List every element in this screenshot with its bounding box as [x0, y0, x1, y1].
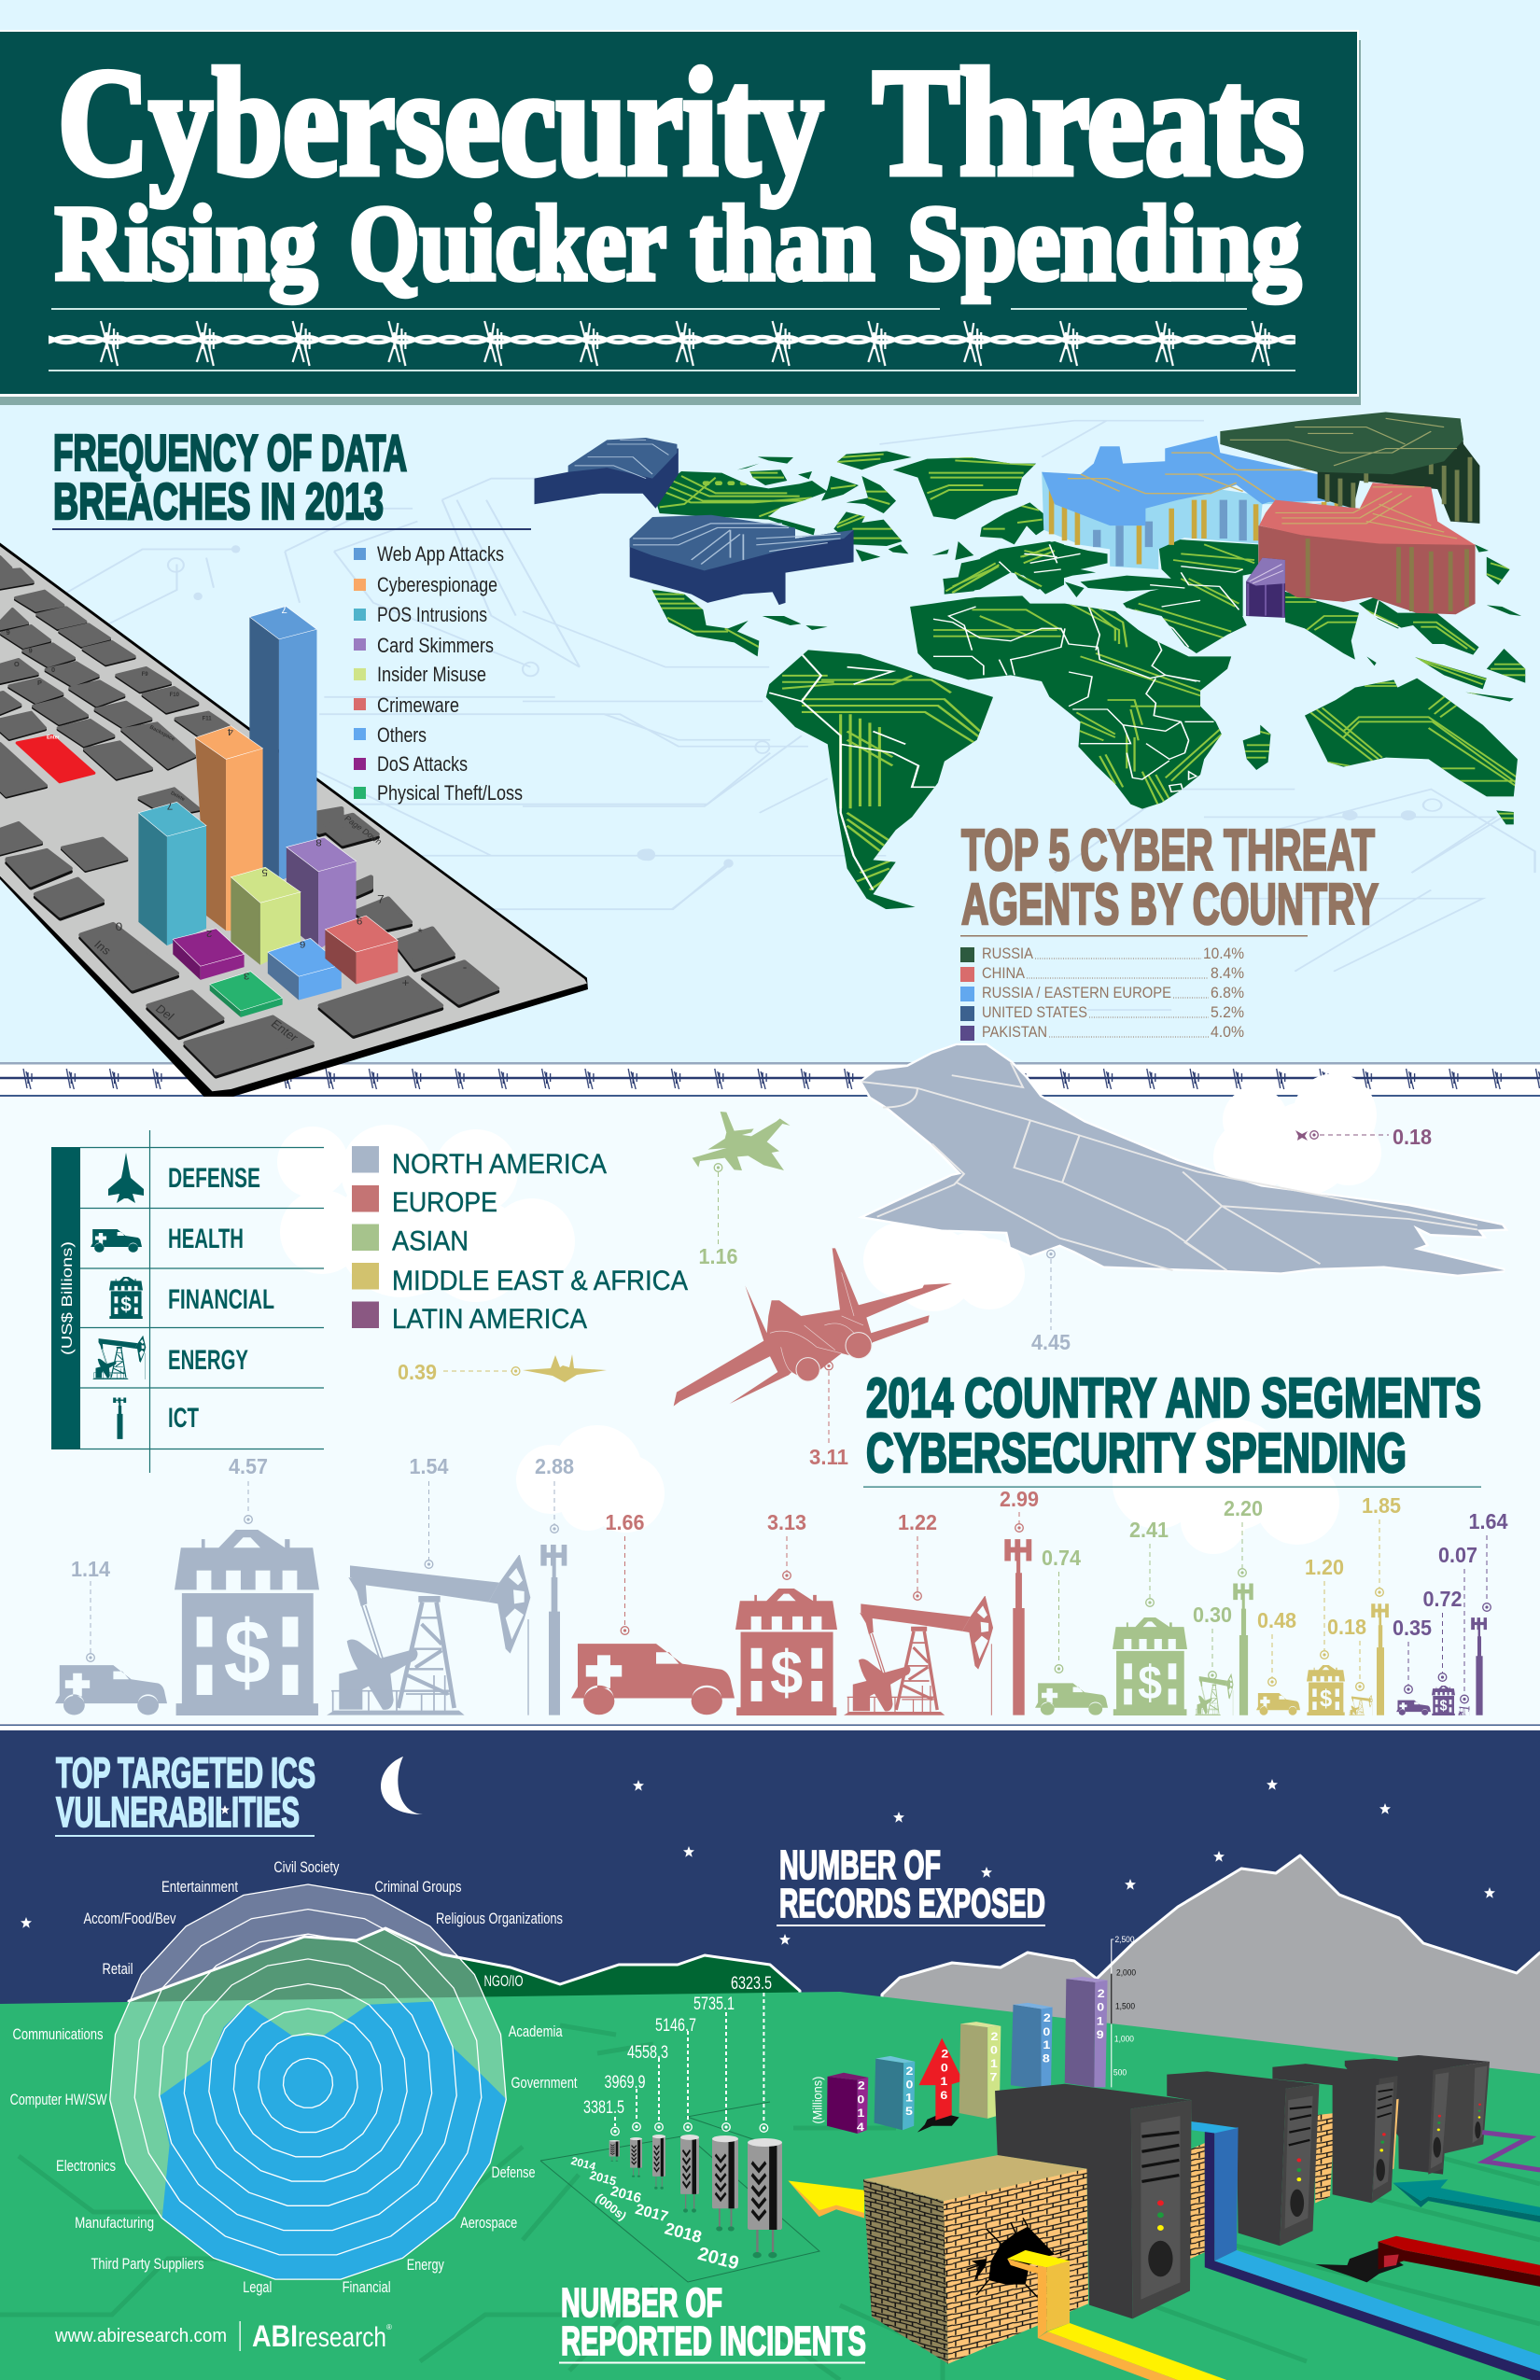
defense value callouts: 1.16: [698, 1244, 737, 1268]
North America spending icons: 1.14: [71, 1557, 110, 1581]
row: energy: [92, 1336, 248, 1379]
bar 2015: 0: [906, 2078, 913, 2091]
circuit background lines: [49, 479, 770, 909]
bar: web app attacks: 7: [281, 604, 287, 614]
jet: Latin America defense: [1295, 1130, 1308, 1141]
hole in wall: [967, 2218, 1070, 2297]
data breach legend: [354, 542, 523, 805]
capacitor bars: [609, 2135, 782, 2258]
brick wall pieces: [1315, 2099, 1399, 2203]
radar axis labels: Energy: [407, 2256, 444, 2274]
key legends: 9: [7, 628, 10, 637]
jet: Middle East defense: [523, 1354, 607, 1382]
value labels: 3381.5: [583, 2098, 624, 2118]
radar axis labels: Civil Society: [273, 1858, 340, 1876]
defense value callouts: 3.11: [809, 1445, 848, 1469]
data breach legend: POS Intrusions: [377, 603, 487, 626]
key legends: 0: [51, 665, 55, 674]
Latin America spending icons: 1.64: [1469, 1509, 1508, 1533]
radar axis labels: Communications: [13, 2025, 103, 2043]
Middle East and Africa spending icons: 0.48: [1257, 1608, 1296, 1632]
heading rule: [777, 1925, 1045, 1926]
bar 2019: 9: [1097, 2028, 1104, 2041]
radar axis labels: Third Party Suppliers: [91, 2255, 203, 2273]
brick wall cube: [863, 2155, 1088, 2364]
crescent moon: [381, 1757, 423, 1814]
bar 2018: 2: [1043, 2011, 1051, 2024]
bar: card skimmers: [287, 837, 357, 950]
bar 2018: 8: [1043, 2052, 1050, 2065]
cloud mid left: [516, 1425, 665, 1533]
key legends: O: [14, 660, 20, 668]
radar axis labels: Entertainment: [161, 1878, 238, 1896]
bar: cyberespionage: 4: [228, 726, 233, 736]
key legends: [7, 628, 212, 803]
jet: North America defense: [861, 1045, 1505, 1275]
title banner: [0, 30, 1361, 405]
Europe spending icons: 2.99: [1000, 1487, 1039, 1511]
radar axis labels: Defense: [491, 2163, 536, 2181]
bar: DoS attacks: [173, 928, 245, 980]
bar: insider misuse: 5: [261, 867, 268, 877]
bar 2017: 0: [990, 2043, 998, 2056]
Latin America spending icons: 0.35: [1393, 1616, 1432, 1640]
bar 2016 arrow: 0: [941, 2061, 948, 2074]
North America spending icons: 2.88: [535, 1454, 574, 1478]
bar: DoS attacks: 2: [206, 928, 212, 938]
radar axis labels: Academia: [509, 2023, 563, 2040]
radar axis labels: Manufacturing: [75, 2214, 154, 2232]
server three: [1272, 2064, 1398, 2203]
threat agents list: 10.4%: [1203, 945, 1244, 962]
Europe spending icons: 1.22: [898, 1510, 937, 1534]
bar 2015: 5: [905, 2105, 914, 2118]
chart floor grid: [540, 2102, 819, 2282]
data breach legend: Crimeware: [377, 693, 459, 717]
yellow arrow breaking through wall: [1007, 2250, 1226, 2380]
title line 2: Spending: [907, 184, 1301, 302]
threat agents list: CHINA: [982, 964, 1026, 982]
bar 2019: 0: [1097, 2000, 1104, 2013]
keyboard lower keys: [7, 808, 497, 1076]
radar axis labels: NGO/IO: [483, 1972, 523, 1990]
radar axis labels: Retail: [103, 1960, 133, 1978]
bar: crimeware: 9: [357, 916, 362, 926]
footer website and logo: ABI: [252, 2319, 298, 2353]
bar 2019: 2: [1098, 1987, 1105, 2000]
cloud lower right: [1113, 1419, 1339, 1554]
bar 2019: 1: [1097, 2014, 1104, 2027]
row: defense: DEFENSE: [168, 1163, 260, 1194]
year labels: 2015: [588, 2168, 618, 2189]
key legends: F11: [203, 717, 212, 722]
spending table: [51, 1130, 324, 1473]
data breach legend: Card Skimmers: [377, 634, 494, 657]
bar 2018: 1: [1043, 2038, 1051, 2051]
data breach legend: DoS Attacks: [377, 752, 468, 776]
key legends: Backspace: [148, 724, 175, 743]
radar axis labels: Aerospace: [460, 2214, 517, 2232]
brick wall piece middle: [1190, 2143, 1205, 2259]
radar axis labels: Criminal Groups: [375, 1878, 461, 1896]
page background: top section: [0, 0, 1540, 1064]
crack under arrow: [917, 2113, 959, 2133]
heading: top 5 cyber threat agents: [961, 819, 1379, 937]
row: financial: [109, 1277, 274, 1319]
key legends: +: [402, 976, 410, 989]
defense value callouts: 0.39: [398, 1360, 437, 1384]
heading: frequency of data breaches: [53, 424, 407, 530]
separator above night scene: [0, 1723, 1540, 1730]
footer website and logo: [54, 2319, 392, 2353]
key legends: Del: [153, 1002, 177, 1023]
radar axis labels: Legal: [243, 2278, 272, 2296]
value labels: [583, 1974, 772, 2118]
Latin America spending icons: 0.72: [1422, 1587, 1462, 1611]
bar: POS intrusions: [138, 800, 206, 945]
circuit traces on Africa, Asia and Australia: [933, 544, 1525, 819]
value labels: 6323.5: [731, 1974, 772, 1994]
key legends: 0: [116, 920, 122, 933]
records axis: 500: [1113, 2068, 1127, 2078]
key legends: 7: [377, 892, 385, 905]
bar 2015: [875, 2056, 915, 2130]
bar 2016 arrow: 6: [940, 2089, 947, 2102]
key legends: F9: [142, 672, 148, 678]
records axis: 2,000: [1116, 1968, 1137, 1978]
bar: card skimmers: 8: [315, 837, 322, 847]
stars: [21, 1779, 1495, 1945]
threat agents list: 6.8%: [1211, 984, 1244, 1001]
title line 2: Quicker: [349, 184, 666, 302]
footer website and logo: www.abiresearch.com: [54, 2326, 227, 2346]
Europe spending icons: 3.13: [767, 1510, 806, 1534]
threat agents list: [960, 945, 1244, 1041]
row: energy: ENERGY: [168, 1345, 248, 1376]
records exposed chart and server scene: [788, 1936, 1540, 2380]
heading: number of reported incidents: [561, 2280, 866, 2364]
records axis: 1,000: [1114, 2035, 1134, 2045]
axis caption: (US$ Billions): [60, 1241, 76, 1355]
Russia extrusion: [1220, 412, 1479, 524]
bar 2017: 1: [990, 2057, 999, 2070]
blue arrow: [1192, 2121, 1540, 2380]
bar 2014: 1: [857, 2107, 865, 2120]
value labels: 4558.3: [627, 2043, 668, 2063]
row: ICT: [113, 1397, 199, 1439]
bar: others: [268, 938, 342, 1001]
key legends: *: [417, 926, 423, 939]
barbed wire band: [0, 1062, 1540, 1097]
Latin America spending icons: [1393, 1509, 1508, 1715]
cloud top right: [1213, 1073, 1381, 1195]
key legends: Ins: [91, 938, 114, 958]
bar: others: 6: [300, 939, 305, 949]
bar 2017: 2: [991, 2030, 998, 2043]
bar 2017: 7: [990, 2070, 997, 2083]
radar axis labels: Government: [511, 2074, 578, 2092]
data breach legend: Insider Misuse: [377, 663, 486, 686]
heading rule: [55, 1835, 315, 1837]
records axis: [1112, 1936, 1137, 2087]
year labels: 2017: [634, 2202, 670, 2225]
bar: insider misuse: [231, 867, 301, 965]
bar: physical theft: 3: [244, 971, 249, 981]
footer website and logo: research: [298, 2322, 386, 2353]
heading rule: [960, 935, 1308, 937]
bar 2018: 0: [1043, 2025, 1050, 2038]
year labels: (000s): [593, 2191, 629, 2223]
title line 2: Rising: [55, 184, 317, 302]
region legend: [352, 1146, 688, 1335]
jet: Asia defense: [693, 1112, 791, 1170]
data breach legend: Cyberespionage: [377, 573, 497, 596]
cloud top left: [277, 1125, 575, 1302]
purple arrow: [1482, 2133, 1540, 2170]
ground circuit traces: [0, 2025, 1540, 2380]
circuit background lines right: [523, 421, 1535, 1010]
heading: top targeted ICS vulnerabilities: VULNERABILITIES: [56, 1788, 300, 1836]
Asian spending icons: 2.41: [1129, 1518, 1169, 1542]
defense value callouts: 0.18: [1393, 1125, 1432, 1149]
heading rule: [863, 1486, 1481, 1488]
key legends: -: [463, 960, 467, 973]
yellow arrow left: [788, 2180, 864, 2218]
key legends: F10: [170, 693, 180, 698]
heading: number of records exposed: NUMBER OF: [779, 1842, 941, 1888]
North America spending icons: 4.57: [229, 1454, 268, 1478]
circuit traces on South America: [782, 676, 980, 889]
bar 2017: [959, 2022, 1001, 2119]
circuit traces on North America and northern Europe: [651, 455, 1055, 647]
heading rule: [52, 528, 531, 530]
defense value callouts: [398, 1125, 1432, 1469]
region legend: LATIN AMERICA: [392, 1304, 587, 1335]
bar 2016 arrow: 2: [941, 2048, 948, 2060]
keyboard plate: [0, 543, 588, 1097]
Asian spending icons: 0.30: [1193, 1603, 1232, 1627]
value labels: 5735.1: [693, 1995, 735, 2014]
threat agents list: 5.2%: [1211, 1003, 1244, 1021]
key legends: P: [37, 679, 42, 687]
enter key in red: [17, 736, 94, 782]
region legend: NORTH AMERICA: [392, 1149, 607, 1180]
heading: frequency of data breaches: BREACHES IN 2013: [53, 472, 384, 530]
year labels: [569, 2154, 741, 2275]
server one: [995, 2084, 1192, 2318]
heading: number of records exposed: [779, 1842, 1045, 1926]
title line 2: [55, 184, 1301, 302]
heading: 2014 spending: [866, 1367, 1481, 1484]
year labels: 2016: [609, 2183, 643, 2206]
servers back row: [1345, 2055, 1490, 2175]
records axis: 2,500: [1114, 1936, 1135, 1945]
region legend: EUROPE: [392, 1187, 497, 1218]
teal arrow: [1393, 2179, 1540, 2222]
heading: top targeted ICS vulnerabilities: TOP TARGETED ICS: [56, 1749, 315, 1797]
data breach legend: Physical Theft/Loss: [377, 781, 523, 805]
year labels: 2014: [569, 2154, 597, 2173]
row: ICT: ICT: [168, 1403, 199, 1434]
threat agents list: UNITED STATES: [982, 1003, 1087, 1021]
key legends: [91, 814, 467, 1044]
keyboard upper keys: [0, 557, 231, 882]
threat agents list: PAKISTAN: [982, 1023, 1047, 1041]
Russia / Eastern Europe extrusion: [1042, 436, 1350, 569]
heading: top targeted ICS vulnerabilities: [56, 1749, 315, 1836]
barbed wire ornament: [49, 309, 1295, 371]
row: health: [91, 1224, 244, 1254]
world map: [535, 412, 1540, 924]
bar 2014: [827, 2073, 868, 2134]
night sky: [0, 1730, 1540, 2029]
North America spending icons: 1.54: [409, 1454, 449, 1478]
records axis: 1,500: [1115, 2002, 1135, 2011]
bar: web app attacks: [249, 604, 316, 881]
key legends: Enter: [268, 1017, 301, 1044]
cloud under jet: [863, 1223, 1025, 1311]
bar 2015: 1: [905, 2091, 914, 2104]
bar: physical theft: [210, 971, 283, 1017]
key legends: Page Down: [343, 814, 384, 847]
Middle East and Africa spending icons: [1256, 1493, 1401, 1715]
year labels: 2018: [663, 2219, 704, 2247]
keyboard upper keys: Enter: [47, 735, 60, 741]
China extrusion: [1258, 483, 1476, 614]
threat agents list: 8.4%: [1211, 964, 1244, 982]
bar: crimeware: [325, 916, 398, 985]
value labels: 3969.9: [605, 2073, 646, 2093]
row: defense: [108, 1153, 260, 1203]
green ground: [0, 1992, 1540, 2380]
row: health: HEALTH: [168, 1224, 244, 1254]
Europe spending icons: 1.66: [605, 1510, 644, 1534]
green hill: [129, 1928, 800, 2016]
key legends: Delete: [170, 791, 186, 803]
USA extrusion: [630, 515, 854, 605]
Europe spending icons: [571, 1487, 1039, 1715]
USA alaska extrusion: [535, 438, 679, 509]
threat agents list: RUSSIA / EASTERN EUROPE: [982, 984, 1171, 1001]
bar 2019: [1065, 1977, 1108, 2087]
jet: Europe defense: [674, 1248, 952, 1407]
radar axis labels: [10, 1858, 578, 2296]
axis caption millions: (Millions): [809, 2077, 824, 2124]
server two: [1167, 2071, 1319, 2246]
bar: POS intrusions: 7: [167, 800, 173, 811]
radar axis labels: Computer HW/SW: [10, 2091, 107, 2108]
region legend: ASIAN: [392, 1226, 469, 1256]
grey mountain: [882, 1855, 1540, 2091]
key legends: 9: [29, 646, 33, 654]
red arrow and crack: [1315, 2236, 1540, 2287]
radar axis labels: Financial: [343, 2278, 391, 2296]
Middle East and Africa spending icons: 1.85: [1362, 1493, 1401, 1518]
Asian spending icons: 0.74: [1042, 1546, 1081, 1570]
North America spending icons: [55, 1454, 574, 1715]
bar 2016 arrow: [918, 2038, 963, 2121]
heading: number of records exposed: RECORDS EXPOSED: [779, 1881, 1045, 1926]
keyboard with 3D bar chart: [0, 543, 588, 1097]
footer website and logo: ®: [386, 2323, 392, 2331]
heading: frequency of data breaches: FREQUENCY OF DATA: [53, 424, 407, 482]
bar: cyberespionage: [195, 726, 263, 931]
bar 2014: 2: [858, 2079, 865, 2092]
row: financial: FINANCIAL: [168, 1284, 274, 1315]
reported incidents chart: [540, 1974, 819, 2282]
Asian spending icons: 2.20: [1224, 1496, 1263, 1520]
data breach legend: Web App Attacks: [377, 542, 504, 566]
bar 2015: 2: [906, 2065, 913, 2078]
bar 2016 arrow: 1: [940, 2075, 948, 2088]
title line 1: Cybersecurity: [58, 38, 823, 207]
defense value callouts: 4.45: [1031, 1330, 1071, 1354]
bar 2018: [1011, 2003, 1053, 2090]
bar 2014: 4: [857, 2121, 864, 2134]
radar axis labels: Electronics: [56, 2157, 116, 2175]
leader lines and markers: [611, 1993, 768, 2135]
heading rule: [559, 2361, 865, 2363]
value labels: 5146.7: [655, 2016, 696, 2036]
title line 2: than: [691, 184, 875, 302]
region legend: MIDDLE EAST & AFRICA: [392, 1266, 688, 1296]
threat agents list: RUSSIA: [982, 945, 1034, 962]
year labels: 2019: [695, 2244, 741, 2275]
Middle East and Africa spending icons: 1.20: [1305, 1555, 1344, 1579]
data breach legend: Others: [377, 723, 427, 747]
Middle East and Africa spending icons: 0.18: [1327, 1615, 1366, 1639]
Asian spending icons: [1035, 1496, 1263, 1715]
country borders on Africa and Eurasia: [933, 544, 1402, 791]
radar axis labels: Accom/Food/Bev: [84, 1910, 176, 1927]
South America borders: [769, 654, 938, 889]
page background: spending section: [0, 1097, 1540, 1731]
bar 2014: 0: [857, 2093, 864, 2106]
radar axis labels: Religious Organizations: [436, 1910, 563, 1927]
Pakistan extrusion: [1246, 558, 1285, 618]
Latin America spending icons: 0.07: [1438, 1543, 1477, 1567]
radar chart: [110, 1884, 506, 2279]
title line 1: Threats: [873, 38, 1304, 207]
heading: number of reported incidents: REPORTED INCIDENTS: [561, 2318, 866, 2364]
land masses: [651, 451, 1525, 909]
threat agents list: 4.0%: [1211, 1023, 1244, 1041]
heading: number of reported incidents: NUMBER OF: [561, 2280, 722, 2326]
